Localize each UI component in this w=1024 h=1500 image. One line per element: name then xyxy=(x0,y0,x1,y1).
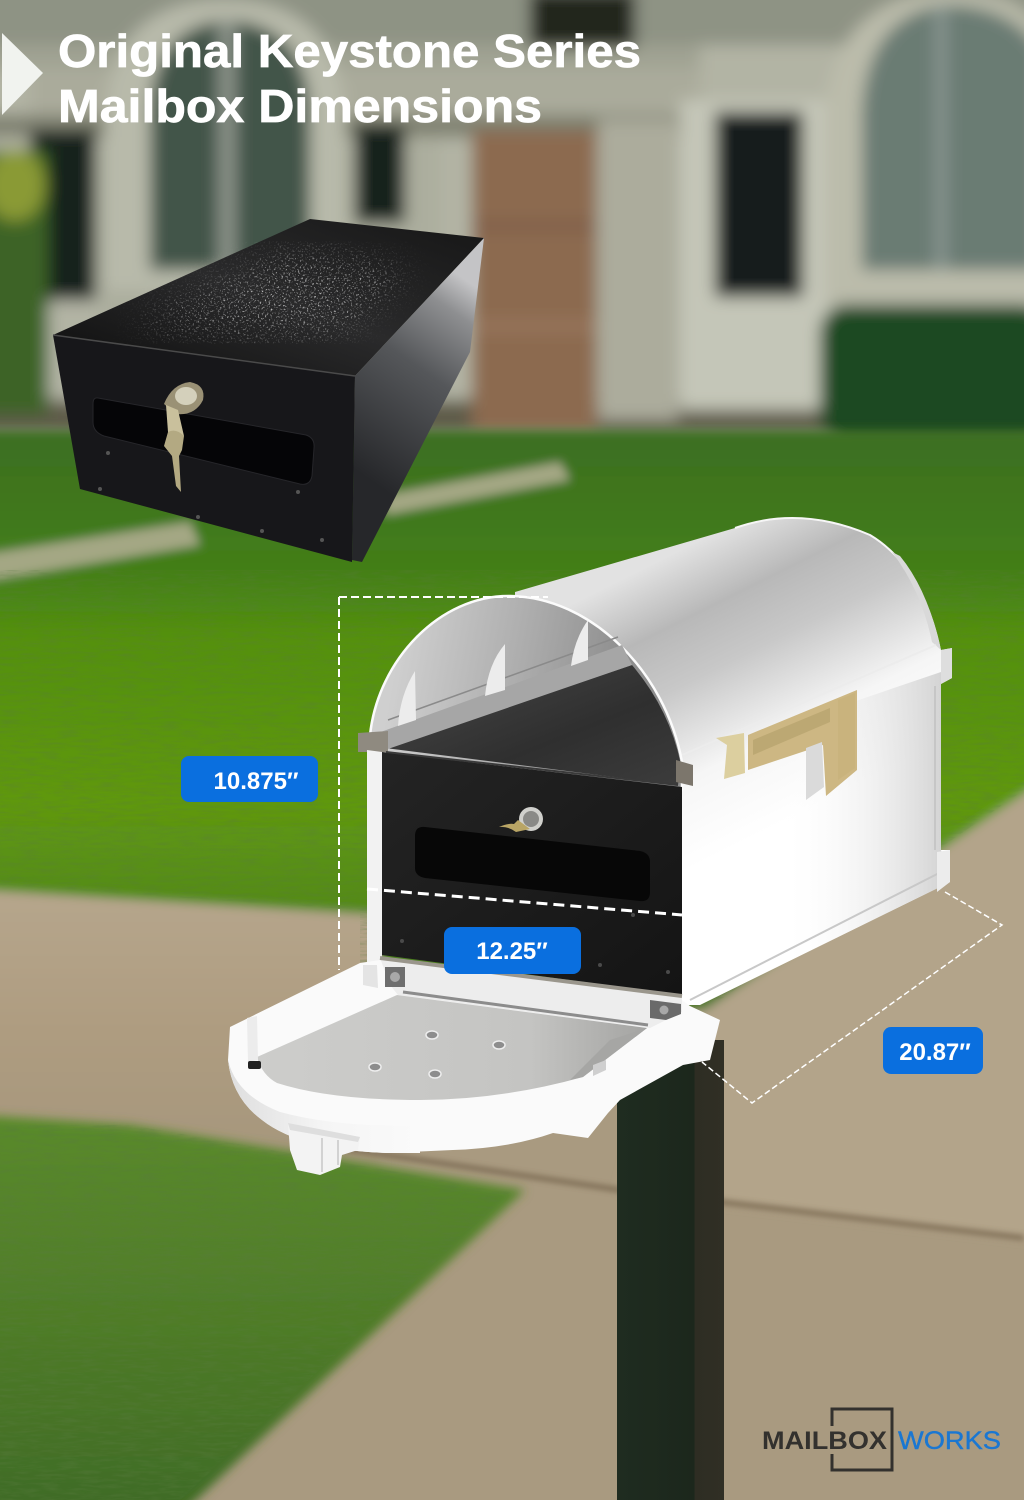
black locking door xyxy=(382,752,682,995)
icon: title arrow xyxy=(2,33,43,115)
door handle xyxy=(288,1123,360,1175)
logo: Mailbox Works: MAILBOX xyxy=(762,1427,887,1455)
front screws xyxy=(98,451,324,542)
lock with key xyxy=(499,807,543,832)
label: 10.875: 10.875″ xyxy=(214,768,299,795)
label: 12.25 xyxy=(444,927,581,974)
logo: Mailbox Works xyxy=(762,1409,1001,1470)
label: 20.87: 20.87″ xyxy=(899,1039,971,1066)
dimension lines xyxy=(339,597,1002,1103)
black locking insert box xyxy=(53,219,484,562)
door side wall post xyxy=(247,1016,258,1062)
hinges xyxy=(385,967,681,1020)
mailbox xyxy=(228,518,952,1175)
logo: Mailbox Works: WORKS xyxy=(898,1427,1001,1455)
interior ribs xyxy=(398,620,588,726)
interior shelf xyxy=(385,665,681,785)
right door arm seam xyxy=(593,1060,606,1076)
title xyxy=(2,25,641,132)
door and hinge base xyxy=(228,960,720,1153)
body side and dome xyxy=(515,518,952,1005)
left upright shadow xyxy=(363,965,378,988)
mail slot xyxy=(93,398,314,484)
title text xyxy=(58,25,641,132)
hinge bar xyxy=(380,958,682,1028)
door peg xyxy=(248,1061,261,1069)
lock and keys xyxy=(164,382,203,492)
title text: Original Keystone Series xyxy=(58,25,641,77)
small screws xyxy=(400,913,670,974)
label: 20.87 xyxy=(883,1027,983,1074)
mail slot xyxy=(415,827,650,901)
label: 10.875 xyxy=(181,756,318,802)
dimension: height xyxy=(339,597,548,970)
lower lawn xyxy=(0,1115,525,1500)
post xyxy=(617,1040,724,1500)
door front rim shading xyxy=(228,1060,420,1153)
interior rail xyxy=(378,645,632,750)
title text: Mailbox Dimensions xyxy=(58,80,542,132)
dimension: depth xyxy=(702,892,1002,1103)
left door frame xyxy=(367,750,382,990)
door bolts xyxy=(369,1031,505,1078)
dimension: width xyxy=(367,889,682,915)
label: 12.25: 12.25″ xyxy=(476,938,548,965)
front hinges xyxy=(358,731,388,752)
door inner tray xyxy=(257,995,647,1100)
gold flag xyxy=(716,690,857,800)
grass texture xyxy=(0,570,1024,1000)
interior arch xyxy=(370,596,682,790)
